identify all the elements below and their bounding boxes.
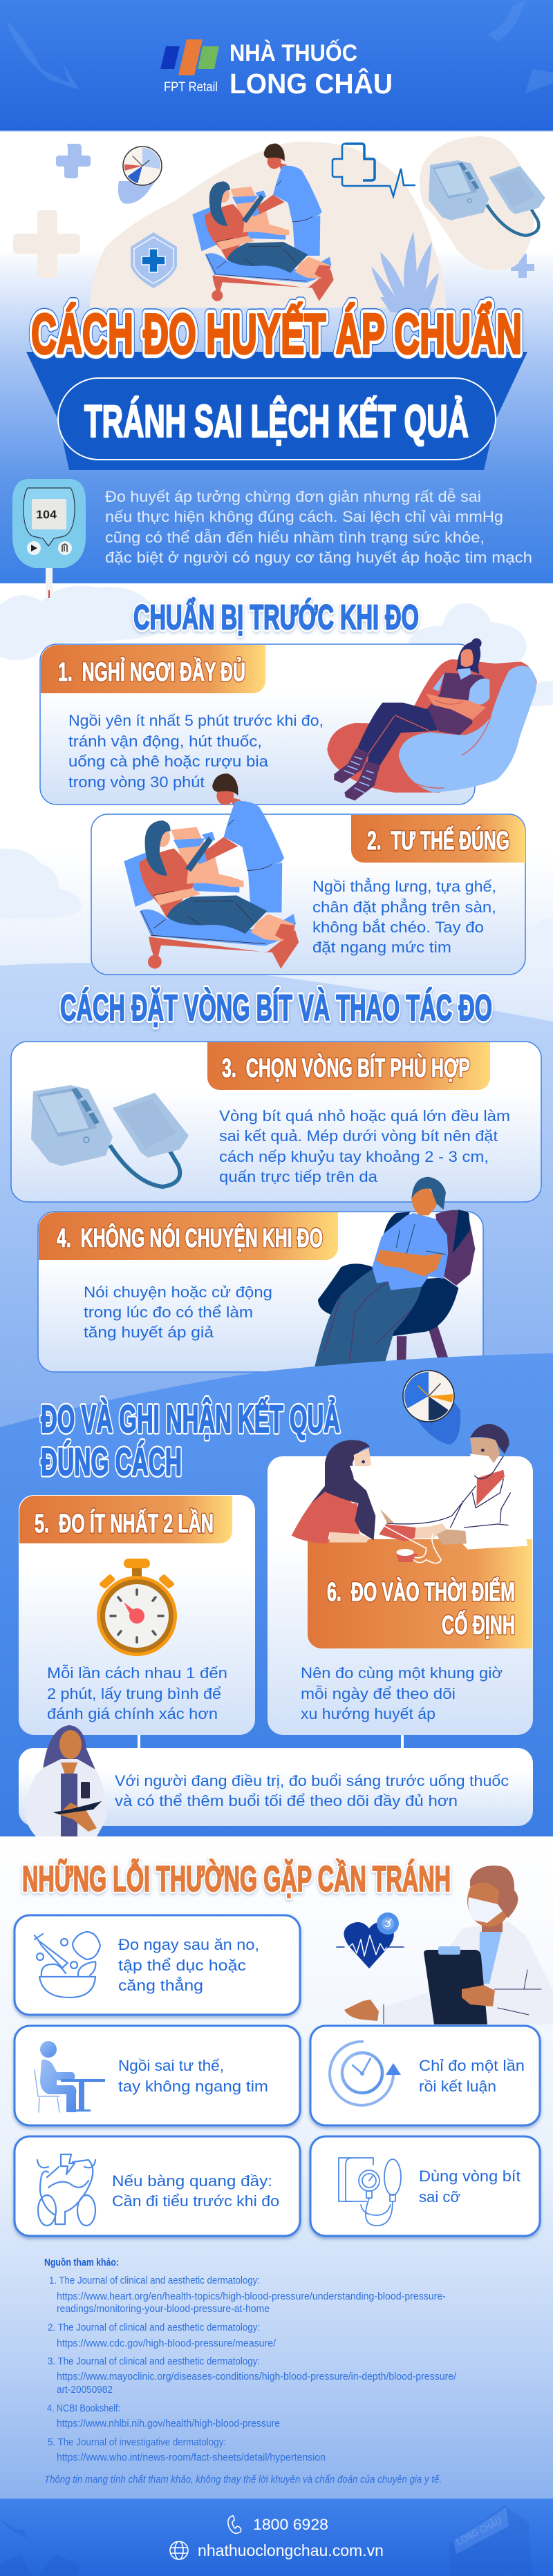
step 5 text: 2 phút, lấy trung bình để	[47, 1685, 221, 1702]
logo: FPT Retail: FPT Retail	[164, 80, 218, 95]
panel: mistake full bladder	[15, 2136, 300, 2236]
header band	[0, 0, 553, 132]
note text: và có thể thêm buổi tối để theo dõi đầy đủ hơn	[115, 1792, 458, 1809]
step 1 heading: 1. NGHỈ NGƠI ĐẦY ĐỦ	[58, 657, 245, 687]
step 1 heading	[58, 657, 245, 687]
step 1 tab	[41, 645, 265, 693]
hero illustration group	[13, 136, 545, 312]
wave: cuff section background	[0, 963, 553, 1451]
panel: step 3 cuff	[11, 1042, 541, 1202]
step 4 text	[84, 1284, 272, 1341]
heading: results: ĐO VÀ GHI NHẬN KẾT QUẢ	[41, 1397, 340, 1440]
text: one reading	[419, 2057, 525, 2095]
logo: FPT Retail	[160, 39, 219, 95]
step 3 text: Vòng bít quá nhỏ hoặc quá lớn đều làm	[219, 1107, 510, 1125]
text: after meal	[118, 1936, 259, 1994]
text: wrong cuff: Dùng vòng bít	[419, 2168, 521, 2185]
step 2 text: không bắt chéo. Tay đo	[312, 919, 484, 936]
icon: shield	[131, 232, 177, 288]
heading: results: ĐÚNG CÁCH	[41, 1440, 182, 1483]
logo: brand name: LONG CHÂU	[229, 68, 393, 100]
decorative clouds	[0, 586, 553, 968]
step 4 text: tăng huyết áp giả	[84, 1324, 214, 1341]
references heading: Nguồn tham khảo:	[44, 2257, 119, 2268]
text: one reading: rồi kết luận	[419, 2078, 496, 2095]
step 2 text	[312, 878, 496, 956]
wave: results section background	[0, 1353, 553, 1836]
step 4 heading	[57, 1222, 323, 1253]
step 6 heading: CỐ ĐỊNH	[442, 1609, 515, 1640]
step 2 text: Ngồi thẳng lưng, tựa ghế,	[312, 878, 496, 895]
step 1 heading: 1. NGHỈ NGƠI ĐẦY ĐỦ	[58, 657, 245, 687]
step 4 text: Nói chuyện hoặc cử động	[84, 1284, 272, 1301]
step 6 tab	[308, 1539, 532, 1648]
note text: Với người đang điều trị, đo buổi sáng trước uống thuốc	[115, 1772, 509, 1789]
step 3 text	[219, 1107, 510, 1185]
step 3 text: cách nếp khuỷu tay khoảng 2 - 3 cm,	[219, 1148, 489, 1165]
icon: medical plus with heartbeat	[332, 144, 415, 196]
step 5 heading: 5. ĐO ÍT NHẤT 2 LẦN	[35, 1508, 214, 1539]
illustration: nurse measuring patient	[192, 144, 334, 301]
text: wrong cuff	[419, 2168, 521, 2206]
step 3 text: sai kết quả. Mép dưới vòng bít nên đặt	[219, 1127, 498, 1145]
icon: globe	[170, 2541, 188, 2559]
background: preparation section	[0, 583, 553, 1026]
step 1 text: trong vòng 30 phút	[68, 773, 205, 791]
heading: results	[41, 1397, 340, 1483]
icon: heart with pulse and gauge	[337, 1912, 404, 1968]
step 4 heading: 4. KHÔNG NÓI CHUYỆN KHI ĐO	[57, 1222, 323, 1253]
text: after meal: căng thẳng	[118, 1977, 203, 1994]
step 3 text: quấn trực tiếp trên da	[219, 1168, 378, 1185]
panel: step 6 fixed time	[268, 1456, 533, 1735]
logo: brand name: NHÀ THUỐC	[229, 39, 357, 66]
step 4 heading: 4. KHÔNG NÓI CHUYỆN KHI ĐO	[57, 1222, 323, 1253]
icon: plus small right	[511, 254, 534, 278]
illustration: woman doctor	[26, 1725, 107, 1836]
panel: mistake wrong cuff	[310, 2136, 540, 2236]
reference list: 1. The Journal of clinical and aesthetic dermatology:	[49, 2275, 260, 2286]
text: wrong cuff: sai cỡ	[419, 2188, 460, 2206]
reference list: https://www.heart.org/en/health-topics/high-blood-pressure/understanding-blood-pressure-	[57, 2291, 446, 2302]
panel: step 5 twice	[19, 1495, 255, 1735]
page background: hero	[0, 131, 553, 583]
title banner	[26, 352, 527, 470]
intro text: đặc biệt ở người có nguy cơ tăng huyết áp hoặc tim mạch	[105, 549, 532, 566]
panel: mistake one reading	[310, 2026, 540, 2125]
step 1 text: uống cà phê hoặc rượu bia	[68, 753, 269, 770]
step 1 text: tránh vận động, hút thuốc,	[68, 733, 262, 750]
step 3 tab	[207, 1042, 490, 1090]
panel: step 2 posture	[91, 814, 525, 975]
icon: plus beige	[13, 210, 80, 278]
text: full bladder: Nếu bàng quang đầy:	[112, 2172, 272, 2190]
logo: brand name	[229, 39, 393, 100]
step 6 text: mỗi ngày để theo dõi	[301, 1685, 456, 1702]
step 6 heading: CỐ ĐỊNH	[442, 1609, 515, 1640]
reference list: 3. The Journal of clinical and aesthetic dermatology:	[48, 2356, 260, 2367]
reference list: 5. The Journal of investigative dermatology:	[48, 2437, 226, 2448]
heading: results: ĐÚNG CÁCH	[41, 1440, 182, 1483]
step 2 text: chân đặt phẳng trên sàn,	[312, 899, 496, 916]
step 5 heading: 5. ĐO ÍT NHẤT 2 LẦN	[35, 1508, 214, 1539]
illustration: seated woman	[315, 1177, 475, 1367]
step 6 text: Nên đo cùng một khung giờ	[301, 1664, 503, 1682]
heading: preparation	[133, 598, 419, 637]
icon: clock	[118, 147, 162, 204]
text: after meal: Đo ngay sau ăn no,	[118, 1936, 259, 1953]
step 6 text	[301, 1664, 503, 1722]
subtitle pill	[58, 378, 496, 460]
decoration: pharmacy building: LONG CHÂU	[454, 2514, 504, 2548]
decoration: pharmacy building	[449, 2506, 532, 2576]
footer band	[0, 2499, 553, 2576]
icon: aloe plant	[371, 232, 439, 312]
reference list	[47, 2275, 457, 2463]
reference list: 4. NCBI Bookshelf:	[47, 2403, 120, 2414]
reference list: https://www.who.int/news-room/fact-sheets/detail/hypertension	[57, 2452, 326, 2463]
icon: bladder	[37, 2154, 95, 2226]
text: full bladder	[112, 2172, 279, 2210]
phone number: 1800 6928	[253, 2516, 328, 2533]
step 6 heading	[327, 1576, 515, 1640]
step 2 text: đặt ngang mức tim	[312, 939, 451, 956]
blob: monitor backdrop	[420, 136, 534, 270]
step 1 text	[68, 712, 324, 791]
step 5 heading	[35, 1508, 214, 1539]
intro text: nếu thực hiện không đúng cách. Sai lệch chỉ vài mmHg	[105, 508, 503, 525]
connector bars	[138, 1735, 404, 1748]
panel: mistake after meal	[15, 1915, 300, 2015]
website: nhathuoclongchau.com.vn	[198, 2541, 384, 2559]
icon: sphygmomanometer	[339, 2158, 401, 2226]
references	[44, 2257, 457, 2485]
step 4 text: trong lúc đo có thể làm	[84, 1304, 253, 1321]
icon: clock with arrow	[330, 2042, 401, 2105]
illustration: male doctor with clipboard	[344, 1865, 553, 2024]
icon: sitting person	[35, 2041, 105, 2112]
step 5 text: Mỗi lần cách nhau 1 đến	[47, 1664, 227, 1682]
text: after meal: tập thể dục hoặc	[118, 1957, 246, 1974]
panel: note card	[19, 1748, 533, 1826]
reference list: https://www.cdc.gov/high-blood-pressure/measure/	[57, 2338, 276, 2349]
panel: step 4 silence	[38, 1212, 483, 1372]
icon: food bowl	[35, 1932, 100, 1997]
text: one reading: Chỉ đo một lần	[419, 2057, 525, 2074]
background: common mistakes	[0, 1836, 553, 2499]
step 5 text	[47, 1664, 227, 1722]
step 2 tab	[351, 815, 525, 863]
step 5 tab	[19, 1496, 232, 1543]
disclaimer: Thông tin mang tính chất tham khảo, không thay thế lời khuyên và chẩn đoán của chuyên gia y tế.	[44, 2474, 442, 2485]
reference list: 2. The Journal of clinical and aesthetic dermatology:	[48, 2322, 260, 2333]
icon: glucose meter: 104	[36, 508, 57, 521]
reference list: https://www.mayoclinic.org/diseases-conditions/high-blood-pressure/in-depth/blood-pressure/	[57, 2371, 457, 2382]
note text	[115, 1772, 509, 1809]
text: posture: tay không ngang tim	[118, 2078, 268, 2095]
heading: results: ĐO VÀ GHI NHẬN KẾT QUẢ	[41, 1397, 340, 1440]
text: full bladder: Cần đi tiểu trước khi đo	[112, 2192, 279, 2210]
icon: stopwatch	[97, 1559, 177, 1656]
illustration: nurse and patient	[124, 773, 299, 968]
reference list: readings/monitoring-your-blood-pressure-at-home	[57, 2304, 270, 2315]
intro text: cũng có thể dẫn đến hiểu nhầm tình trạng sức khỏe,	[105, 529, 485, 546]
intro text: Đo huyết áp tưởng chừng đơn giản nhưng rất dễ sai	[105, 488, 481, 505]
reference list: https://www.nhlbi.nih.gov/health/high-blood-pressure	[57, 2418, 280, 2429]
icon: blood pressure monitor	[429, 160, 545, 236]
panel: mistake posture	[15, 2026, 300, 2125]
illustration: doctor measuring patient	[292, 1424, 527, 1563]
reference list: art-20050982	[57, 2385, 113, 2396]
panel: step 1 rest	[40, 644, 475, 805]
intro text	[105, 488, 532, 566]
blob: beige backdrop	[90, 142, 446, 308]
illustration: relaxing woman in armchair	[327, 638, 537, 800]
icon: phone	[228, 2516, 241, 2533]
step 1 text: Ngồi yên ít nhất 5 phút trước khi đo,	[68, 712, 324, 729]
step 5 text: đánh giá chính xác hơn	[47, 1705, 218, 1722]
icon: clock with blob	[403, 1371, 460, 1445]
icon: glucose meter	[12, 479, 86, 598]
step 6 text: xu hướng huyết áp	[301, 1705, 435, 1722]
step 4 tab	[39, 1212, 338, 1260]
text: posture: Ngồi sai tư thế,	[118, 2057, 224, 2074]
icon: plus blue	[56, 144, 91, 178]
icon: monitor and cuff	[31, 1085, 189, 1187]
text: posture	[118, 2057, 268, 2095]
